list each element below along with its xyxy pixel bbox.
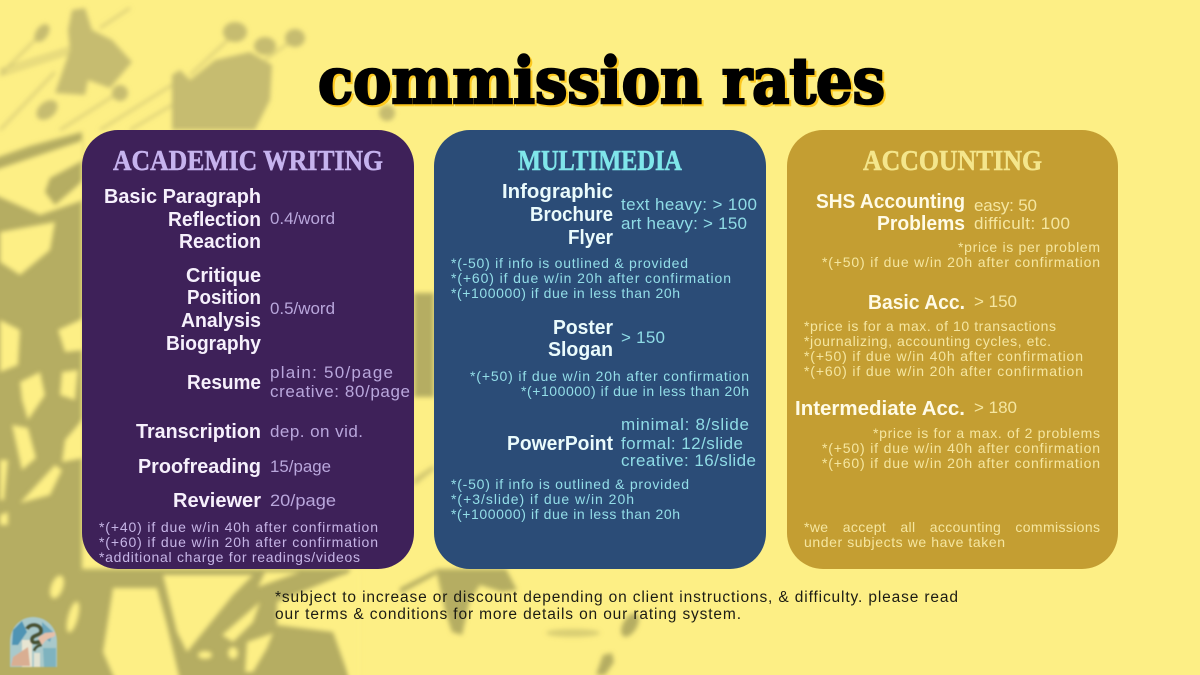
prices: easy: 50 [974, 196, 1037, 215]
service labels: Transcription [136, 421, 261, 443]
notes: *(+100000) if due in less than 20h [451, 285, 680, 301]
title: commission rates [320, 46, 887, 121]
notes: *(+40) if due w/in 40h after confirmation [99, 519, 378, 535]
notes: *(+60) if due w/in 20h after confirmation [822, 455, 1100, 471]
service labels [502, 181, 613, 455]
notes: *price is per problem [958, 239, 1100, 255]
notes: *(+60) if due w/in 20h after confirmation [451, 270, 731, 286]
prices: minimal: 8/slide [621, 415, 749, 434]
footnote: our terms & conditions for more details on our rating system. [275, 606, 741, 623]
prices: creative: 16/slide [621, 451, 756, 470]
notes: *price is for a max. of 2 problems [873, 425, 1100, 441]
prices: text heavy: > 100 [621, 195, 757, 214]
notes: *price is for a max. of 10 transactions [804, 318, 1056, 334]
notes: *(+60) if due w/in 20h after confirmation [804, 363, 1083, 379]
notes [804, 239, 1100, 550]
panel: academic writing [82, 130, 414, 569]
notes: *(+60) if due w/in 20h after confirmation [99, 534, 378, 550]
footnote: *subject to increase or discount depending on client instructions, & difficulty. please read [275, 589, 958, 606]
heading: academic writing: ACADEMIC WRITING [113, 146, 383, 177]
prices: > 180 [974, 398, 1017, 417]
service labels: Critique [186, 265, 261, 287]
prices: difficult: 100 [974, 214, 1070, 233]
notes [451, 255, 749, 522]
service labels: Reviewer [173, 490, 261, 512]
prices [974, 196, 1070, 417]
service labels: Reaction [179, 231, 261, 253]
service labels: Proofreading [138, 456, 261, 478]
prices: 15/page [270, 457, 331, 476]
service labels: Slogan [548, 339, 613, 361]
notes: *(+3/slide) if due w/in 20h [451, 491, 634, 507]
prices: formal: 12/slide [621, 434, 743, 453]
notes: *journalizing, accounting cycles, etc. [804, 333, 1051, 349]
prices: art heavy: > 150 [621, 214, 747, 233]
service labels: Flyer [568, 227, 613, 249]
service labels: Intermediate Acc. [795, 398, 965, 420]
prices [270, 209, 410, 510]
service labels [795, 191, 965, 420]
notes: *(+50) if due w/in 40h after confirmation [804, 348, 1083, 364]
panel: accounting [787, 130, 1118, 569]
footnote [275, 589, 958, 623]
service labels: SHS Accounting [816, 191, 965, 213]
notes: under subjects we have taken [804, 534, 1005, 550]
prices: > 150 [621, 328, 665, 347]
prices: dep. on vid. [270, 422, 363, 441]
icon: arched logo [10, 617, 57, 667]
service labels [104, 186, 262, 512]
notes: *(+50) if due w/in 20h after confirmation [822, 254, 1100, 270]
service labels: Basic Acc. [868, 292, 965, 314]
notes: *(+50) if due w/in 40h after confirmation [822, 440, 1100, 456]
notes: *additional charge for readings/videos [99, 549, 360, 565]
notes: *(-50) if info is outlined & provided [451, 476, 689, 492]
prices: creative: 80/page [270, 382, 410, 401]
service labels: Poster [553, 317, 613, 339]
notes: *(+100000) if due in less than 20h [451, 506, 680, 522]
service labels: Biography [166, 333, 262, 355]
prices: 20/page [270, 491, 336, 510]
notes: *(+100000) if due in less than 20h [521, 383, 749, 399]
notes: *(-50) if info is outlined & provided [451, 255, 688, 271]
service labels: Reflection [168, 209, 261, 231]
notes [99, 519, 378, 565]
service labels: Position [187, 287, 261, 309]
notes: *(+50) if due w/in 20h after confirmation [470, 368, 749, 384]
heading: multimedia: MULTIMEDIA [518, 146, 683, 177]
prices: 0.4/word [270, 209, 335, 228]
prices: plain: 50/page [270, 363, 393, 382]
prices: 0.5/word [270, 299, 335, 318]
prices: > 150 [974, 292, 1017, 311]
service labels: Infographic [502, 181, 613, 203]
panel: multimedia [434, 130, 766, 569]
heading: accounting: ACCOUNTING [863, 146, 1042, 177]
service labels: Basic Paragraph [104, 186, 261, 208]
service labels: Analysis [181, 310, 261, 332]
service labels: Problems [877, 213, 965, 235]
notes: *we accept all accounting commissions [804, 519, 1100, 535]
title: commission rates [318, 44, 885, 119]
service labels: Brochure [530, 204, 613, 226]
service labels: PowerPoint [507, 433, 613, 455]
service labels: Resume [187, 372, 261, 394]
prices [621, 195, 757, 470]
